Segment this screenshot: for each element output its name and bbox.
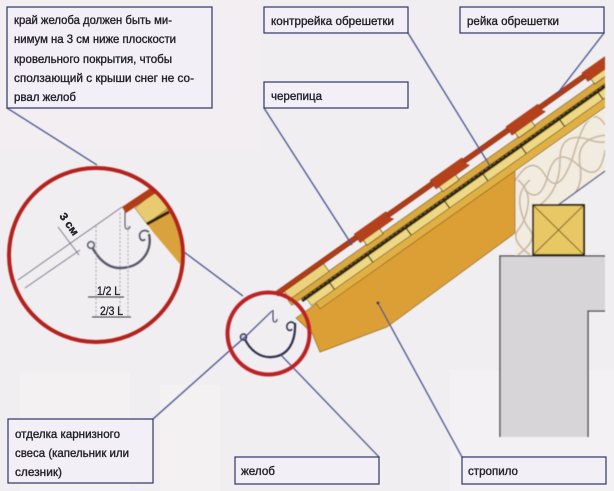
callout: counter batten [264, 7, 408, 33]
beam [533, 205, 584, 255]
dimension labels: 3 см [57, 211, 81, 238]
dimension labels [57, 211, 123, 318]
callout: tile [264, 82, 408, 108]
dimension labels: 2/3 L [100, 304, 123, 318]
callout: gutter edge: сползающий с крыши снег не со- [14, 71, 194, 85]
callout: eaves trim: отделка карнизного [15, 427, 120, 441]
callout: gutter [235, 457, 379, 484]
batten band [307, 68, 614, 306]
dimension lines [18, 207, 131, 318]
roof layers [276, 56, 606, 310]
tile strip [276, 74, 586, 297]
callout: gutter edge: нимум на 3 см ниже плоскости [14, 32, 176, 46]
insulation edge line [558, 171, 605, 205]
eaves batten [284, 264, 329, 299]
callout: rafter: стропило [468, 464, 518, 478]
magnified detail [18, 187, 185, 318]
small gutter [240, 310, 295, 357]
lower strip [315, 98, 606, 310]
callout: eaves trim [8, 419, 153, 483]
callout: gutter edge: кровельного покрытия, чтобы [14, 52, 172, 66]
callout: gutter edge: рвал желоб [14, 90, 76, 104]
circles [9, 168, 183, 342]
callout: gutter edge: край желоба должен быть ми- [14, 13, 172, 27]
callout: eaves trim: свеса (капельник или [15, 446, 129, 460]
callout: batten [460, 7, 604, 33]
callout: gutter: желоб [241, 464, 275, 478]
callout: gutter edge [7, 7, 212, 108]
callout: eaves trim: слезник) [15, 465, 62, 479]
gutter detail [88, 211, 150, 268]
callout: rafter [462, 457, 606, 484]
callout: counter batten: контррейка обрешетки [271, 14, 394, 28]
tile lugs and battens [354, 50, 614, 248]
insulation [514, 108, 606, 256]
dimension labels: 1/2 L [97, 284, 120, 298]
rafter [296, 165, 515, 352]
callout: batten: рейка обрешетки [467, 14, 559, 28]
rafter mark [376, 302, 380, 304]
wall [500, 256, 605, 437]
membrane [301, 68, 614, 302]
counter batten band [288, 63, 614, 305]
callout: tile: черепица [271, 89, 322, 103]
